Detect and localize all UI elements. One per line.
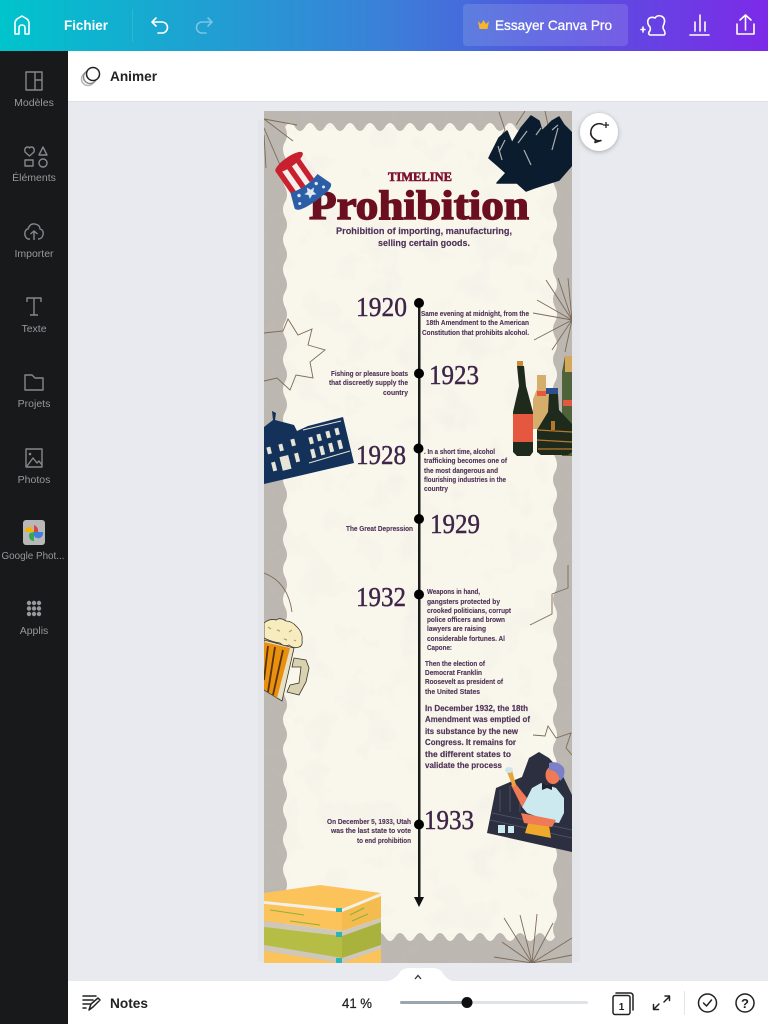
icon: animate circles — [82, 68, 100, 86]
year 1933: 1933 — [424, 805, 474, 835]
event 1932 gangsters text: Weapons in hand, — [427, 589, 480, 596]
item: Photos — [18, 449, 50, 486]
timeline axis with arrow — [414, 298, 424, 907]
icon: people — [641, 16, 665, 35]
poster shadow — [258, 120, 580, 962]
item: Projets — [18, 375, 50, 410]
event 1928 text — [424, 449, 508, 493]
icon: crown — [478, 20, 489, 29]
starburst: top left — [264, 119, 297, 168]
event December 1932 text: its substance by the new — [425, 726, 518, 736]
event 1920 text: 18th Amendment to the American — [426, 320, 529, 327]
cream paper — [275, 115, 565, 945]
icon: pages: 1 — [619, 1002, 625, 1013]
year 1920: 1920 — [356, 292, 407, 322]
year 1923: 1923 — [429, 360, 479, 390]
event 1920 text — [421, 311, 529, 337]
event 1932 Roosevelt text — [425, 661, 504, 696]
event 1920 text: Same evening at midnight, from the — [421, 311, 529, 318]
event 1933 text: to end prohibition — [357, 838, 411, 845]
sidebar — [0, 51, 68, 1024]
icon: home — [15, 16, 29, 34]
event 1929 text: The Great Depression — [346, 526, 413, 533]
label: Notes: Notes — [110, 995, 148, 1011]
event 1928 text: country — [424, 486, 448, 493]
event 1920 text: Constitution that prohibits alcohol. — [422, 330, 529, 337]
event December 1932 text: Congress. It remains for — [425, 737, 517, 747]
file menu label: Fichier — [64, 17, 109, 33]
event 1923 text: that discreetly supply the — [329, 380, 408, 387]
button: try Canva Pro — [463, 4, 628, 46]
event 1923 text: Fishing or pleasure boats — [331, 371, 408, 378]
icon: help — [736, 994, 754, 1012]
event 1933 text — [327, 819, 411, 845]
divider — [132, 9, 133, 42]
icon: brush ink mountains — [489, 116, 572, 191]
item: Google Photos: Google Phot... — [2, 550, 64, 562]
event 1932 gangsters text — [427, 589, 512, 652]
event 1928 text: flourishing industries in the — [424, 477, 506, 484]
label: Animer: Animer — [110, 68, 158, 84]
event 1928 text: the most dangerous and — [424, 468, 498, 475]
event 1923 text — [329, 371, 408, 397]
item: Texte — [21, 298, 47, 335]
event 1932 gangsters text: considerable fortunes. Al — [427, 636, 505, 643]
year 1929: 1929 — [430, 509, 480, 539]
event 1932 gangsters text: gangsters protected by — [427, 599, 500, 606]
event December 1932 text: Amendment was emptied of — [425, 714, 530, 724]
bottom bar — [68, 968, 768, 1024]
event 1932 gangsters text: crooked politicians, corrupt — [427, 608, 512, 615]
event 1932 gangsters text: lawyers are raising — [427, 626, 486, 633]
icon: bartender at bar — [487, 752, 572, 852]
event December 1932 text: In December 1932, the 18th — [425, 703, 528, 713]
star outline: bottom right — [533, 726, 572, 755]
icon: uncle sam hat — [275, 152, 332, 210]
item: Éléments: Éléments — [12, 171, 56, 184]
item: Google Photos — [2, 520, 64, 562]
title: Prohibition: Prohibition — [309, 182, 529, 228]
icon: fullscreen — [654, 996, 670, 1010]
event December 1932 text: validate the process — [425, 760, 502, 770]
subtitle: selling certain goods. — [378, 238, 470, 249]
icon: share — [737, 15, 754, 34]
item: Modèles — [14, 72, 54, 109]
year 1928: 1928 — [356, 440, 406, 470]
item: Importer — [14, 224, 54, 260]
icon: redo — [196, 18, 212, 33]
item: Photos: Photos — [18, 474, 50, 486]
icon: bottles — [513, 356, 572, 456]
icon: pages — [613, 993, 633, 1014]
event 1933 text: On December 5, 1933, Utah — [327, 819, 411, 826]
event 1928 text: trafficking becomes one of — [424, 458, 508, 465]
top bar — [0, 0, 768, 51]
event 1933 text: was the last state to vote — [330, 828, 411, 835]
icon: check — [698, 994, 716, 1012]
subtitle — [336, 226, 512, 249]
item: Projets: Projets — [18, 398, 50, 410]
zoom percent: 41 % — [342, 995, 372, 1011]
star outline: left — [264, 319, 325, 390]
collapse tab — [380, 968, 458, 982]
icon: help: ? — [741, 996, 749, 1011]
comment button — [580, 113, 618, 151]
icon: beer mug — [264, 619, 309, 701]
animate toolbar — [68, 51, 768, 102]
item: Modèles: Modèles — [14, 97, 54, 109]
item: Importer: Importer — [14, 248, 54, 260]
icon: chart — [690, 15, 709, 35]
year 1932: 1932 — [356, 582, 406, 612]
arc above beer — [264, 573, 292, 612]
zoom slider — [400, 997, 588, 1008]
icon: undo — [152, 18, 168, 33]
item: Applis: Applis — [20, 625, 48, 637]
heading: TIMELINE: TIMELINE — [388, 169, 452, 184]
star outline: top right — [490, 111, 548, 155]
divider — [684, 991, 685, 1015]
jagged line: right — [530, 565, 568, 625]
item: Applis — [20, 601, 48, 637]
canvas background — [68, 102, 768, 981]
icon: stacked crates — [264, 885, 381, 963]
event December 1932 text: the different states to — [425, 749, 511, 759]
event 1932 gangsters text: police officers and brown — [427, 617, 505, 624]
subtitle: Prohibition of importing, manufacturing, — [336, 226, 512, 237]
event 1932 Roosevelt text: Then the election of — [425, 661, 486, 668]
starburst: bottom right — [494, 914, 572, 963]
event 1932 Roosevelt text: the United States — [425, 689, 480, 696]
paper border — [264, 111, 572, 963]
item: Texte: Texte — [21, 323, 47, 335]
event 1932 gangsters text: Capone: — [427, 645, 452, 652]
event 1923 text: country — [383, 390, 408, 397]
event 1932 Roosevelt text: Democrat Franklin — [425, 670, 482, 677]
button: try Canva Pro: Essayer Canva Pro — [495, 17, 612, 33]
event 1932 Roosevelt text: Roosevelt as president of — [425, 679, 504, 686]
event December 1932 text — [425, 703, 530, 770]
icon: notes — [83, 996, 100, 1010]
event 1928 text: . In a short time, alcohol — [424, 449, 495, 456]
poster: Prohibition timeline — [264, 111, 572, 963]
starburst: right — [533, 278, 572, 352]
item: Éléments — [12, 147, 56, 184]
icon: white house — [264, 411, 354, 484]
